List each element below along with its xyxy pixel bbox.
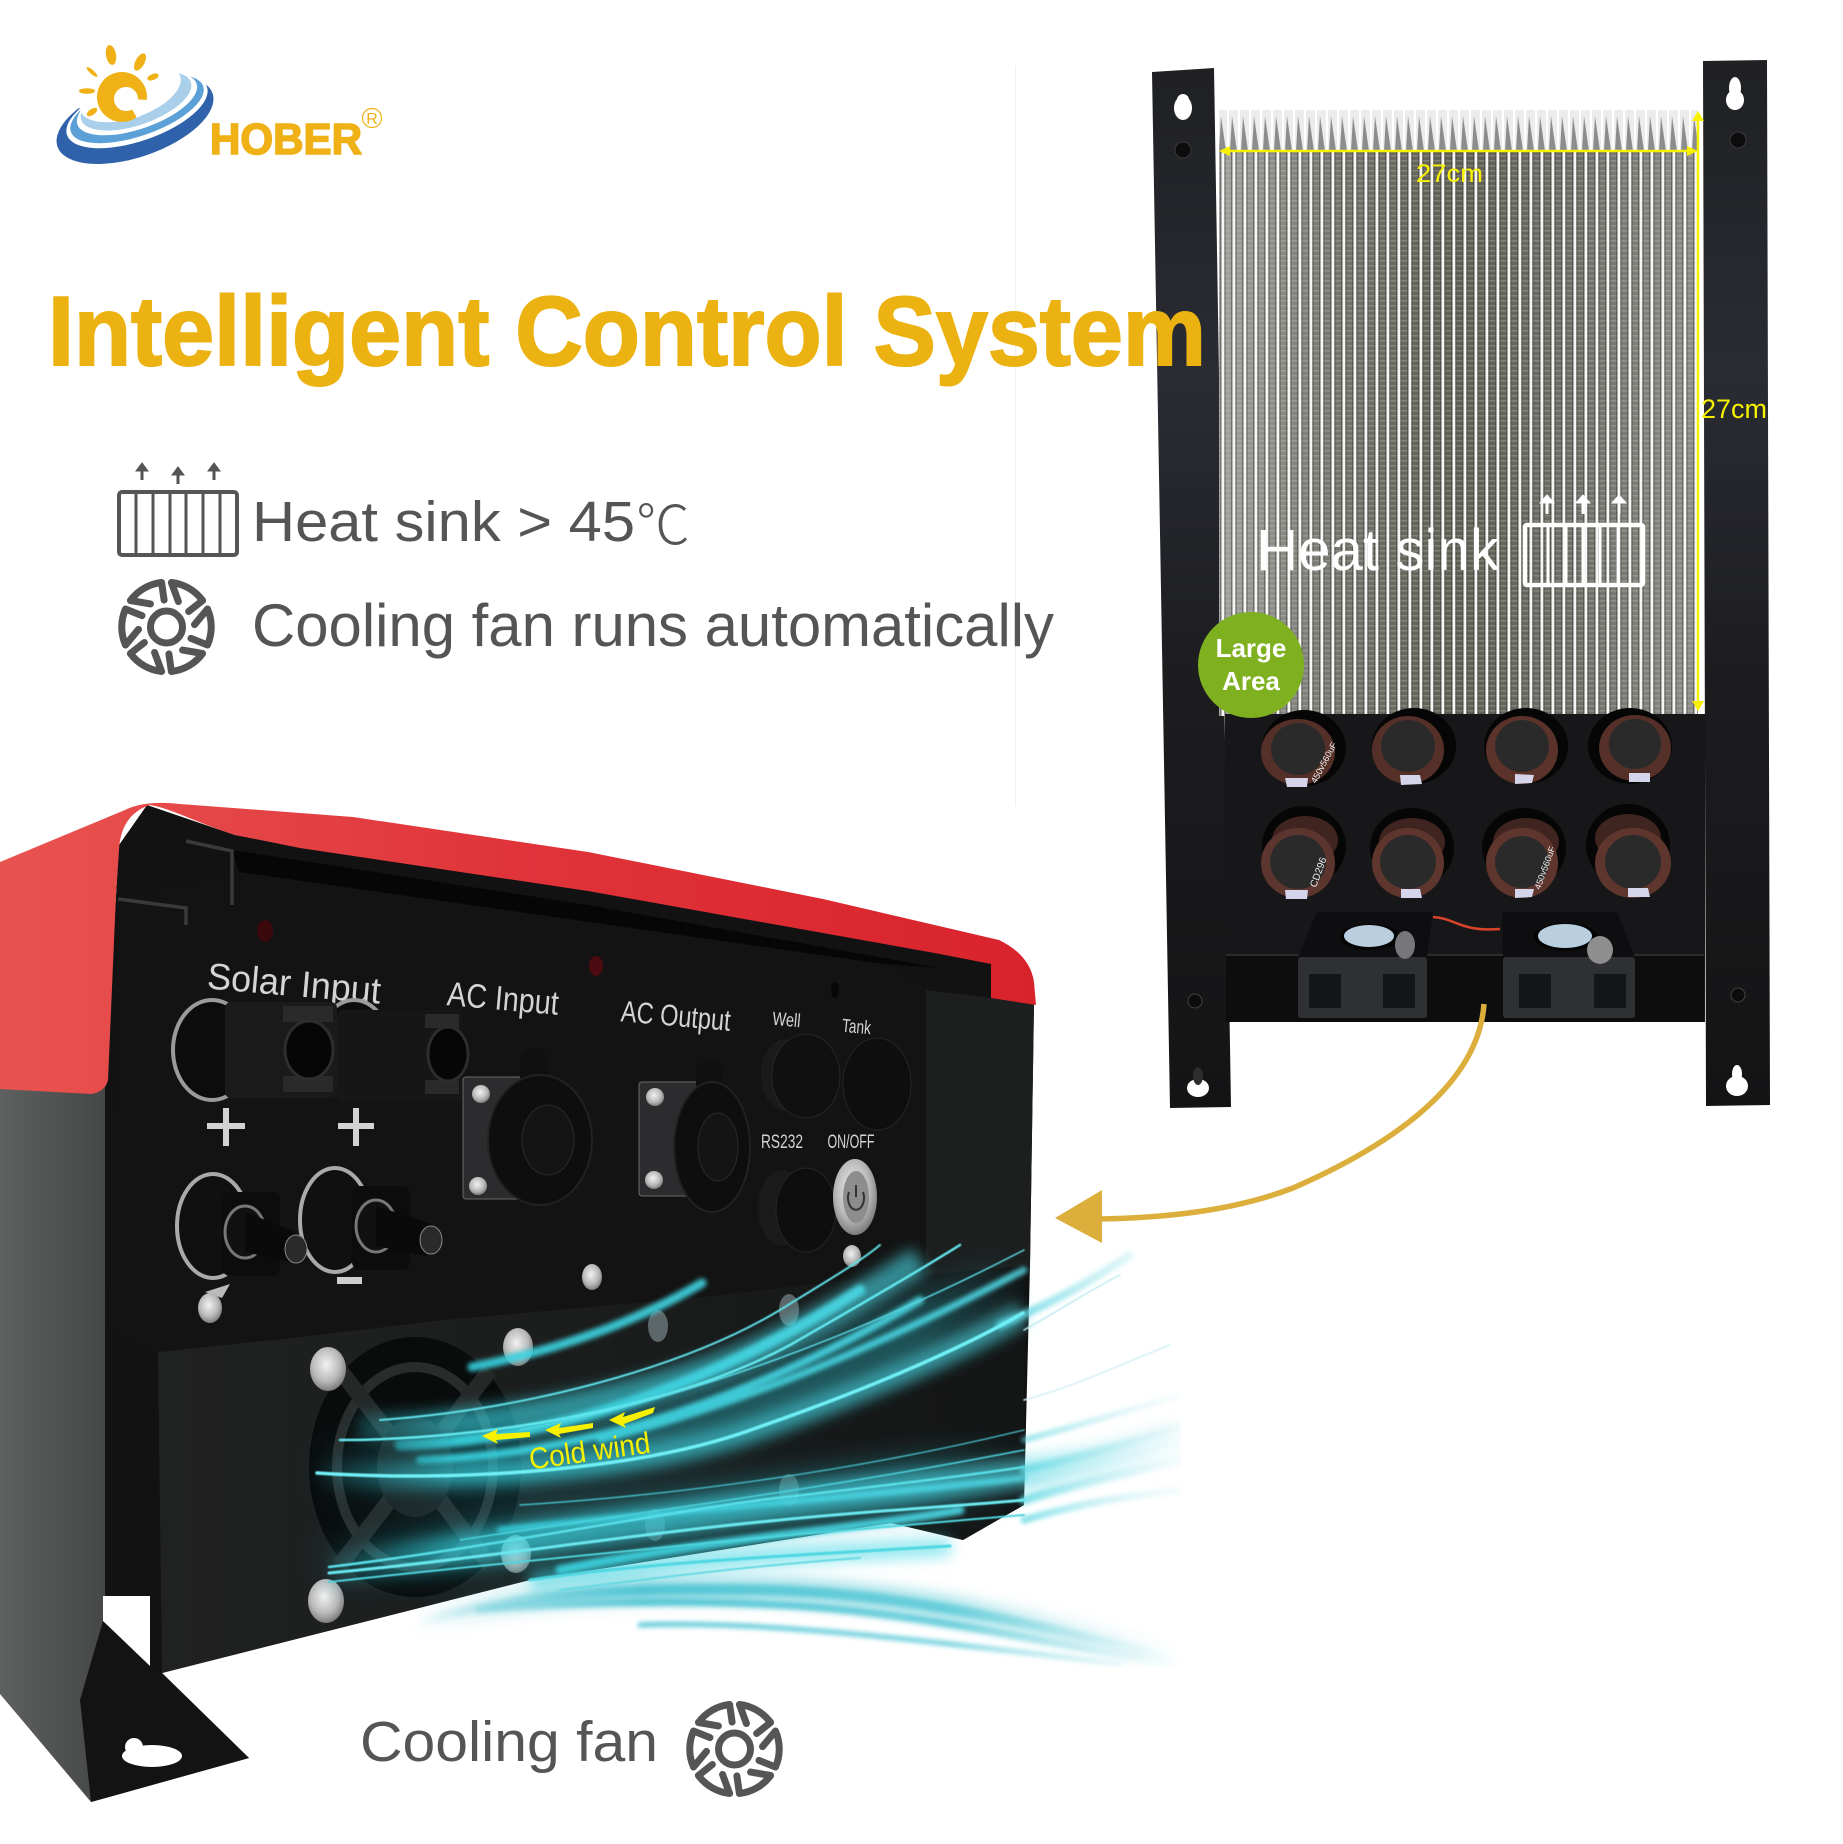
red top cover [0,803,1036,1094]
label: well: Well [772,1009,801,1032]
small sockets well tank rs232 [758,1034,911,1252]
rail channel [232,850,940,968]
indicator lights [257,920,839,998]
mounting foot [80,1596,249,1802]
side wall [0,1085,249,1802]
internal cooling fans [1298,912,1635,1018]
lower chassis bay [1225,714,1705,1022]
badge: large area: Area [1222,666,1280,696]
logo: HOBER: HOBER [210,115,362,164]
badge: large area: Large [1216,633,1286,663]
label: cold wind: Cold wind [527,1427,652,1476]
heat sink fins [1219,110,1698,716]
logo: HOBER [45,44,382,182]
heat sink label: Heat sink [1256,518,1500,583]
airflow direction arrows [482,1407,655,1444]
capacitors: 450v560uF [1532,844,1557,891]
icon: fan [122,579,211,675]
plus marks [207,1108,374,1146]
bracket holes [1174,77,1748,1097]
label: on/off: ON/OFF [828,1132,874,1153]
cold wind airflow streaks [317,1245,1181,1664]
icon: white heat sink [1525,495,1643,585]
label: ac input: AC Input [446,975,561,1023]
left mounting bracket [1152,68,1231,1108]
front face [105,805,1034,1673]
icon: fan bottom [690,1701,779,1797]
cooling fan grille [309,1337,521,1597]
panel: heat sink device photo [1152,60,1770,1108]
right mounting bracket [1703,60,1770,1106]
capacitors [1261,708,1672,899]
label: ac output: AC Output [620,995,733,1038]
logo: HOBER: R [366,111,378,128]
text: cooling fan: Cooling fan [360,1710,658,1774]
dimension: height 27cm: 27cm [1701,394,1767,424]
screws [198,1245,861,1623]
badge: large area [1198,612,1304,718]
capacitors: 450v560uF [1309,740,1339,785]
right inner wall [926,990,1034,1275]
label: solar input: Solar Input [206,956,383,1012]
icon: heat sink [119,463,237,555]
solar connectors upper [173,1000,468,1102]
label: tank: Tank [841,1016,872,1039]
dimension: height 27cm [1692,111,1767,711]
power button [833,1159,877,1235]
lower fan panel [158,1265,1024,1673]
solar connectors lower [177,1168,442,1298]
text: fan runs automatically: Cooling fan runs automatically [252,592,1054,659]
dimension: width 27cm: 27cm [1416,160,1483,188]
text: heat sink temperature: Heat sink > 45 [252,490,635,554]
text: heat sink temperature: ℃ [636,496,690,556]
title: Intelligent Control System [48,276,1206,386]
ac output socket [639,1059,750,1212]
ac input socket [463,1048,592,1205]
panel: inverter front photo [0,803,1036,1802]
capacitors: CD296 [1308,856,1330,889]
dimension: width 27cm [1219,146,1698,188]
upper plate [108,872,926,1352]
curved arrow from fans to cooling fan [1055,1004,1484,1243]
label: rs232: RS232 [761,1132,803,1153]
